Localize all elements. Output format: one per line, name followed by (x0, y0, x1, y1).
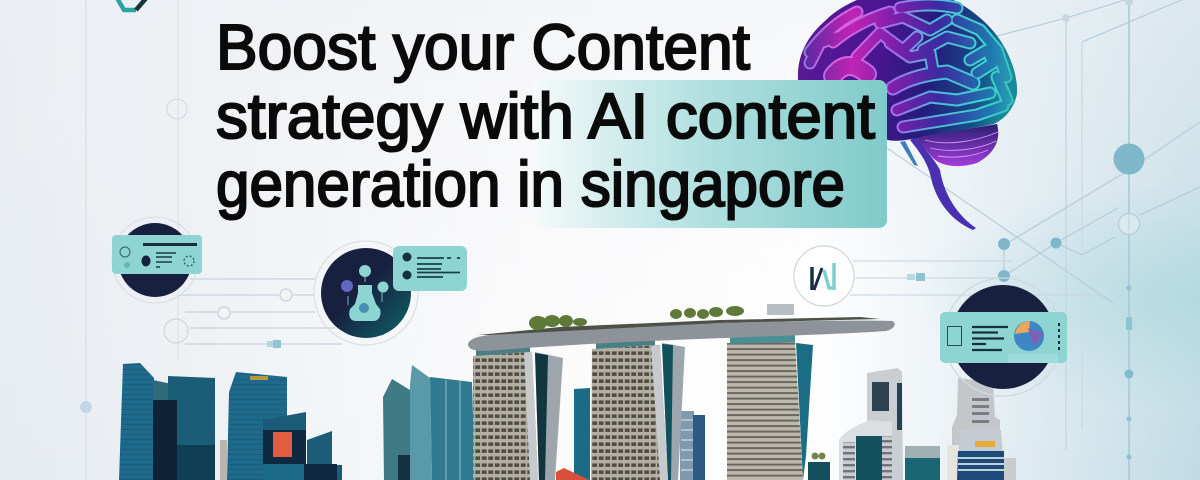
grey high-rise (952, 378, 1000, 480)
Marina Bay Sands (468, 304, 895, 480)
mid-left tower group (383, 365, 475, 480)
brain nerve (900, 141, 918, 166)
rooftop unit (767, 304, 794, 315)
tower 3 (227, 372, 287, 480)
blue banded tower (947, 430, 1016, 480)
info card (393, 246, 467, 291)
small red roof (556, 468, 589, 480)
tower legs (535, 343, 813, 480)
tower 1 (119, 363, 154, 480)
logo mark (117, 0, 148, 10)
tower with dark windows (867, 368, 903, 480)
title (216, 11, 875, 220)
icon: brain (798, 0, 1017, 230)
brain folds: ridges (810, 5, 1007, 127)
cerebellum (916, 124, 998, 166)
skyline: small mid towers (556, 388, 830, 480)
skypark deck (468, 321, 895, 351)
blue-grey tower (680, 411, 705, 480)
tower fronts (473, 341, 803, 480)
icon: flask circle with card (314, 241, 467, 345)
teal tower (574, 388, 590, 480)
flask nodes (341, 265, 388, 321)
dark tower (153, 400, 177, 480)
tower 2 (168, 376, 215, 480)
small grey tower (220, 440, 227, 480)
skypark gardens (529, 306, 744, 330)
report card (940, 312, 1067, 363)
icon: left circle with card (112, 217, 202, 303)
network lines: left (86, 0, 342, 480)
title line 1: Boost your Content (216, 11, 750, 83)
small angled tower (304, 431, 342, 480)
skyline: right towers (839, 368, 1016, 480)
title line 2: strategy with AI content (216, 80, 875, 152)
network nodes: right (907, 0, 1144, 460)
title line 3: generation in singapore (216, 148, 845, 220)
info card (112, 235, 202, 274)
skyline: left cluster (119, 363, 475, 480)
curved podium tower (839, 420, 892, 480)
low green building (905, 446, 940, 480)
tower caps (476, 335, 795, 356)
highlight box behind headline (533, 80, 887, 228)
angled tower with red panel (263, 412, 306, 480)
network nodes: left (80, 99, 292, 413)
brain folds: edges (810, 5, 1007, 127)
icon: right circle with report card (940, 278, 1067, 396)
cerebrum (798, 0, 1017, 141)
tower 1 shoulder (153, 380, 172, 402)
network lines: right (850, 0, 1200, 480)
brain stem (910, 136, 976, 230)
skypark terrace (478, 317, 880, 335)
icon: W logo circle (794, 246, 854, 306)
small rooftop-garden tower (808, 452, 830, 480)
